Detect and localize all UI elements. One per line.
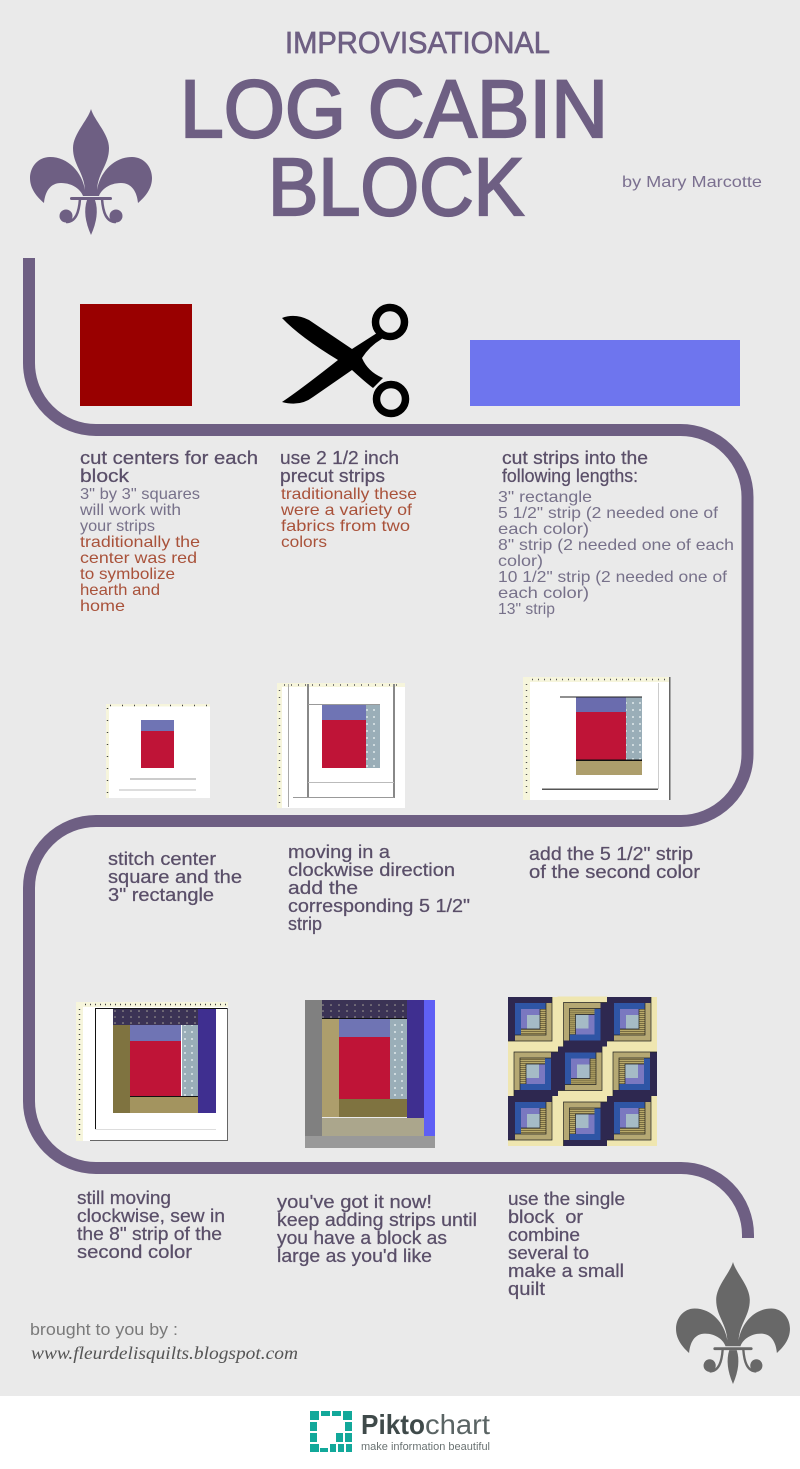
- text: step 4: second color: [77, 1242, 192, 1262]
- text: step 2: corresponding 5 1/2": [288, 896, 470, 916]
- text: step 5: large as you'd like: [277, 1246, 432, 1266]
- title: BLOCK: [268, 142, 524, 233]
- text: cut centers: [79, 448, 258, 615]
- text: step 5: you've got it now!: [277, 1192, 432, 1212]
- icon: purple fleur-de-lis: [30, 109, 152, 235]
- text: strip lengths: each color): [498, 521, 589, 538]
- text: step 4: clockwise, sew in: [77, 1206, 225, 1226]
- text: step 3: [529, 844, 700, 882]
- text: strip lengths: cut strips into the: [502, 448, 648, 468]
- text: step 3: of the second color: [529, 862, 700, 882]
- text: step 2: strip: [288, 914, 322, 934]
- text: step 6: several to: [508, 1243, 589, 1263]
- text: cut centers: to symbolize: [80, 566, 175, 583]
- text: step 2: [288, 842, 470, 934]
- red center square: [80, 304, 192, 406]
- text: step 6: quilt: [508, 1279, 545, 1299]
- icon: grey fleur-de-lis: [676, 1262, 790, 1384]
- text: step 5: keep adding strips until: [277, 1210, 477, 1230]
- text: strip lengths: 3" rectangle: [498, 489, 592, 506]
- icon: scissors: [282, 308, 406, 414]
- text: precut strips: use 2 1/2 inch: [280, 448, 399, 468]
- text: precut strips: precut strips: [280, 466, 385, 486]
- text: cut centers: hearth and: [80, 582, 160, 599]
- text: step 4: [77, 1188, 225, 1262]
- text: cut centers: will work with: [79, 502, 181, 519]
- text: strip lengths: 8" strip (2 needed one of each: [498, 537, 734, 554]
- text: step 5: [277, 1192, 477, 1266]
- text: step 3: add the 5 1/2" strip: [529, 844, 693, 864]
- text: step 6: block or: [508, 1207, 583, 1227]
- Piktochart logo: [310, 1409, 490, 1453]
- text: step 2: moving in a: [288, 842, 391, 862]
- image: finished quilt: [508, 996, 657, 1146]
- author credit: by Mary Marcotte: [622, 174, 762, 191]
- text: step 1: 3" rectangle: [108, 885, 214, 905]
- title: LOG CABIN: [180, 64, 608, 155]
- Piktochart logo: Pikto: [361, 1409, 425, 1440]
- text: step 1: stitch center: [108, 849, 216, 869]
- text: precut strips: [280, 448, 417, 551]
- text: cut centers: 3" by 3" squares: [80, 486, 200, 503]
- text: strip lengths: 10 1/2" strip (2 needed one of: [498, 569, 728, 586]
- text: cut centers: your strips: [80, 518, 155, 535]
- text: step 6: use the single: [508, 1189, 625, 1209]
- text: step 2: clockwise direction: [288, 860, 455, 880]
- text: strip lengths: color): [498, 553, 543, 570]
- text: step 4: still moving: [77, 1188, 171, 1208]
- image: step 5 block: [305, 1000, 435, 1148]
- text: strip lengths: following lengths:: [502, 466, 638, 486]
- image: step 4 block: [76, 1002, 228, 1141]
- image: step 2 block: [277, 683, 405, 808]
- image: step 1 block: [106, 704, 210, 798]
- text: strip lengths: [498, 448, 734, 618]
- text: step 2: add the: [288, 878, 358, 898]
- title: [180, 25, 608, 233]
- image: step 3 block: [523, 677, 670, 800]
- text: step 6: combine: [508, 1225, 580, 1245]
- text: cut centers: center was red: [80, 550, 197, 567]
- text: precut strips: were a variety of: [280, 502, 413, 519]
- text: cut centers: traditionally the: [80, 534, 200, 551]
- text: precut strips: fabrics from two: [281, 518, 410, 535]
- text: cut centers: block: [80, 466, 130, 486]
- white footer band: [0, 1396, 800, 1469]
- footer credit: [30, 1320, 298, 1363]
- blue fabric strip: [470, 340, 740, 406]
- Piktochart logo: make information beautiful: [361, 1441, 490, 1453]
- footer credit: brought to you by :: [30, 1320, 178, 1339]
- text: precut strips: colors: [281, 534, 327, 551]
- text: strip lengths: 13" strip: [498, 601, 555, 618]
- text: step 4: the 8" strip of the: [77, 1224, 222, 1244]
- text: step 1: square and the: [108, 867, 242, 887]
- text: precut strips: traditionally these: [281, 486, 417, 503]
- text: cut centers: cut centers for each: [80, 448, 258, 468]
- text: cut centers: home: [80, 598, 125, 615]
- text: step 6: make a small: [508, 1261, 624, 1281]
- title: IMPROVISATIONAL: [285, 25, 550, 60]
- text: strip lengths: each color): [498, 585, 589, 602]
- text: strip lengths: 5 1/2" strip (2 needed one of: [498, 505, 719, 522]
- text: step 1: [108, 849, 242, 905]
- text: step 6: [508, 1189, 625, 1299]
- Piktochart logo: chart: [425, 1409, 490, 1440]
- footer credit: www.fleurdelisquilts.blogspot.com: [31, 1343, 298, 1363]
- text: step 5: you have a block as: [277, 1228, 447, 1248]
- winding path line: [29, 258, 748, 1238]
